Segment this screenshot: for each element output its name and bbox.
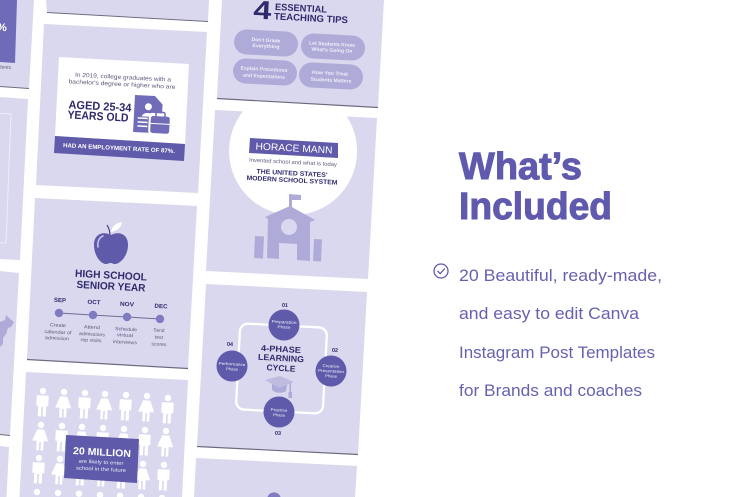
card: left outlined partial	[0, 97, 28, 260]
text block: description: and easy to edit Canva	[459, 304, 640, 323]
timeline: Attend	[84, 324, 100, 331]
phase 02: Presentation	[318, 368, 344, 374]
icon: school building	[254, 194, 322, 262]
phase 03: 03	[275, 431, 281, 437]
intro text: In 2019, college graduates with a	[75, 73, 172, 84]
timeline: Send	[153, 327, 165, 334]
timeline: SEP	[54, 298, 66, 304]
heading: high school senior year	[75, 268, 148, 294]
intro text	[68, 73, 176, 91]
heading: 4-phase learning cycle: CYCLE	[266, 362, 296, 374]
icon: graduation cap	[265, 376, 294, 398]
timeline: scores	[151, 341, 167, 348]
phase 04: Performance	[218, 361, 247, 367]
pill: let students know: Let Students Know	[309, 41, 355, 49]
pill: don't grade everything: Everything	[252, 43, 280, 50]
phase 01: Preparation	[271, 319, 297, 325]
pill: let students know	[300, 33, 366, 61]
pill: explain procedures: and Expectations	[243, 73, 285, 81]
phase 04: 04	[227, 342, 234, 348]
phase 02: Creative	[322, 363, 340, 369]
heading: aged 25-34 years old: AGED 25-34	[68, 99, 132, 115]
timeline: Schedule	[115, 326, 137, 333]
icon: check circle	[434, 264, 448, 278]
text block: description	[459, 266, 662, 400]
text block	[246, 158, 338, 187]
pill: explain procedures: Explain Procedures	[240, 66, 288, 74]
timeline: admissions	[79, 331, 106, 338]
cycle frame	[236, 323, 327, 414]
heading: high school senior year: HIGH SCHOOL	[75, 268, 148, 284]
callout: 20 million: school in the future	[76, 465, 126, 474]
card: top centre partial	[46, 0, 209, 22]
timeline: Create	[50, 322, 66, 329]
timeline: OCT	[87, 300, 101, 306]
card: left map partial	[0, 271, 19, 436]
banner: employment rate: HAD AN EMPLOYMENT RATE OF 87%.	[63, 143, 175, 155]
timeline: NOV	[120, 302, 134, 308]
timeline: virtual	[117, 332, 133, 339]
phase 03	[264, 396, 294, 437]
timeline	[44, 298, 168, 348]
timeline: admission	[45, 335, 69, 342]
card: essential teaching tips	[217, 0, 384, 108]
card: bottom centre partial	[194, 458, 357, 497]
card: aged 25-34	[36, 24, 207, 193]
heading: 4-phase learning cycle: LEARNING	[258, 352, 305, 364]
phase 04: Phase	[226, 366, 239, 372]
pill: don't grade everything: Don't Grade	[251, 37, 281, 45]
phase 01	[268, 303, 300, 340]
card: 20 million	[20, 372, 188, 497]
pill: let students know: What's Going On	[311, 47, 353, 55]
timeline: test	[155, 334, 164, 341]
phase 02: Phase	[325, 373, 338, 379]
phase 03: Practice	[270, 407, 289, 413]
pill: how you treat students: Students Matters	[310, 77, 352, 85]
heading: what's included: What’s	[459, 146, 582, 188]
icon: document and briefcase	[133, 95, 171, 135]
heading: what's included	[459, 146, 612, 228]
intro text: bachelor's degree or higher who are	[68, 79, 176, 91]
card: high school senior year	[27, 198, 197, 368]
phase 03: Phase	[273, 412, 286, 418]
timeline: DEC	[154, 304, 168, 310]
icon: apple	[94, 222, 128, 264]
name banner: HORACE MANN	[255, 141, 333, 157]
text block: THE UNITED STATES'	[256, 168, 328, 179]
text block: description: 20 Beautiful, ready-made,	[459, 266, 662, 285]
phase 02	[316, 348, 346, 386]
heading: 4 essential teaching tips: ESSENTIAL	[275, 2, 327, 16]
heading: aged 25-34 years old	[67, 99, 132, 125]
callout: 20 million	[64, 435, 139, 483]
heading: 4-phase learning cycle: 4-PHASE	[261, 343, 302, 355]
card: horace mann	[206, 110, 377, 279]
text block: Invented school and what is today	[249, 158, 337, 168]
timeline: calendar of	[44, 329, 72, 336]
heading: 4 essential teaching tips: TEACHING TIPS	[274, 11, 348, 26]
phase 02: 02	[332, 348, 338, 354]
pill: explain procedures	[232, 58, 298, 86]
card: left bottom partial	[0, 446, 9, 497]
pill: how you treat students	[298, 62, 364, 90]
timeline: interviews	[113, 339, 138, 346]
card: left percentage partial	[0, 0, 34, 88]
callout: 20 million: 20 MILLION	[73, 446, 131, 460]
callout: 20 million: are likely to enter	[78, 459, 124, 467]
pill: don't grade everything	[233, 29, 299, 57]
timeline: rep visits	[80, 337, 102, 344]
text block: MODERN SCHOOL SYSTEM	[246, 175, 338, 187]
heading: what's included: Included	[459, 186, 612, 228]
phase 01: 01	[282, 303, 288, 309]
banner: employment rate	[54, 136, 185, 161]
text block: description: Instagram Post Templates	[459, 343, 655, 362]
heading: aged 25-34 years old: YEARS OLD	[67, 109, 129, 125]
heading: high school senior year: SENIOR YEAR	[76, 279, 146, 294]
name banner	[249, 138, 338, 158]
pill: how you treat students: How You Treat	[312, 70, 348, 78]
people pictogram	[32, 387, 174, 497]
phase 01: Phase	[277, 324, 292, 330]
heading: 4 essential teaching tips	[253, 0, 348, 26]
phase 04	[216, 342, 248, 382]
text block: description: for Brands and coaches	[459, 381, 642, 400]
card: 4-phase learning cycle	[197, 284, 367, 454]
heading: 4-phase learning cycle	[258, 343, 305, 374]
